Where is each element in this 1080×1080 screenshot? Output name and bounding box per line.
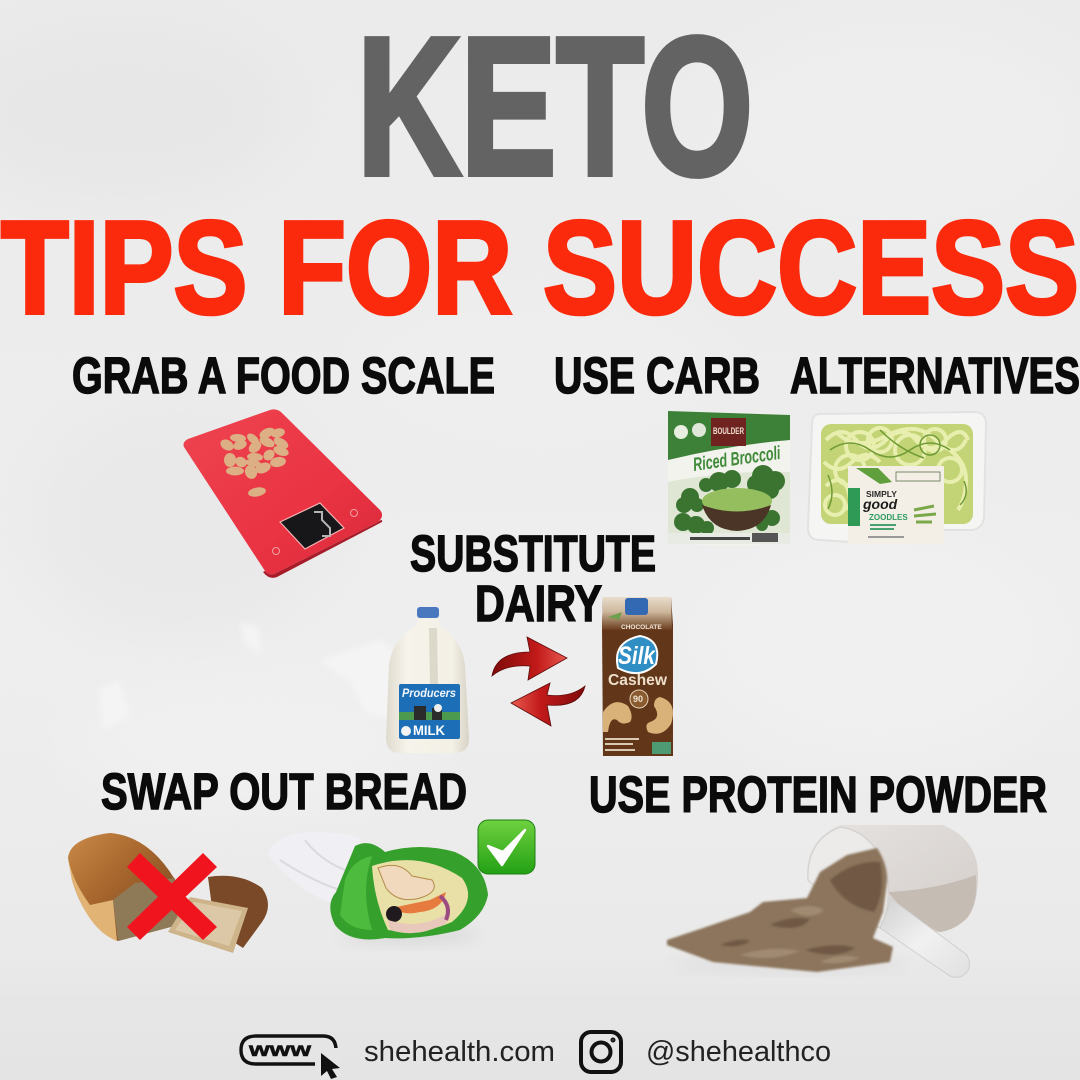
heading: grab a food scale: GRAB A FOOD SCALE xyxy=(72,347,495,404)
text: Riced Broccoli: Riced Broccoli xyxy=(692,443,782,476)
text: instagram handle: @shehealthco xyxy=(646,1036,831,1068)
icon: instagram xyxy=(581,1032,621,1072)
image: silk cashew carton xyxy=(602,597,673,756)
arrow: swap right xyxy=(492,637,567,680)
heading: use carb alternatives xyxy=(554,347,1080,404)
text: Boulder brand: BOULDER xyxy=(713,426,744,436)
almonds xyxy=(218,426,290,498)
image: protein powder scoop xyxy=(667,825,978,977)
powder pile xyxy=(667,848,893,972)
heading: substitute dairy xyxy=(410,525,656,632)
image: bread loaf crossed out xyxy=(68,833,268,953)
icon: www cursor: www xyxy=(248,1040,311,1061)
scoop handle xyxy=(880,898,970,977)
icon: red food scale with almonds xyxy=(184,409,382,578)
text: chocolate: CHOCOLATE xyxy=(621,624,662,631)
text: zoodles: ZOODLES xyxy=(869,513,908,522)
arrow: swap left xyxy=(511,683,585,726)
title: KETO: KETO xyxy=(357,0,753,216)
image: zoodles tray: good xyxy=(862,496,898,512)
text: Cashew: Cashew xyxy=(608,672,668,689)
image: zoodles tray xyxy=(808,412,986,544)
icon: www cursor xyxy=(241,1036,341,1079)
heading: substitute dairy: DAIRY xyxy=(475,575,602,632)
heading: substitute dairy: SUBSTITUTE xyxy=(410,525,656,582)
text: simply good: SIMPLY xyxy=(866,489,897,499)
text: Silk: Silk xyxy=(618,642,656,670)
text: 90 calories: 90 xyxy=(633,694,643,704)
heading: swap out bread: SWAP OUT BREAD xyxy=(101,763,467,820)
text: Producers: Producers xyxy=(402,686,456,700)
icon: red x xyxy=(127,853,217,940)
heading: use carb alternatives: USE CARB xyxy=(554,347,760,404)
footer: contact bar xyxy=(241,1032,831,1079)
text: MILK: MILK xyxy=(413,722,445,738)
image: milk jug xyxy=(386,607,469,753)
text: website: shehealth.com xyxy=(364,1036,555,1068)
scoop cup xyxy=(808,825,978,932)
image: riced broccoli bag xyxy=(668,411,790,546)
image: lettuce wrap xyxy=(268,832,488,943)
icon: green check mark xyxy=(478,820,535,874)
